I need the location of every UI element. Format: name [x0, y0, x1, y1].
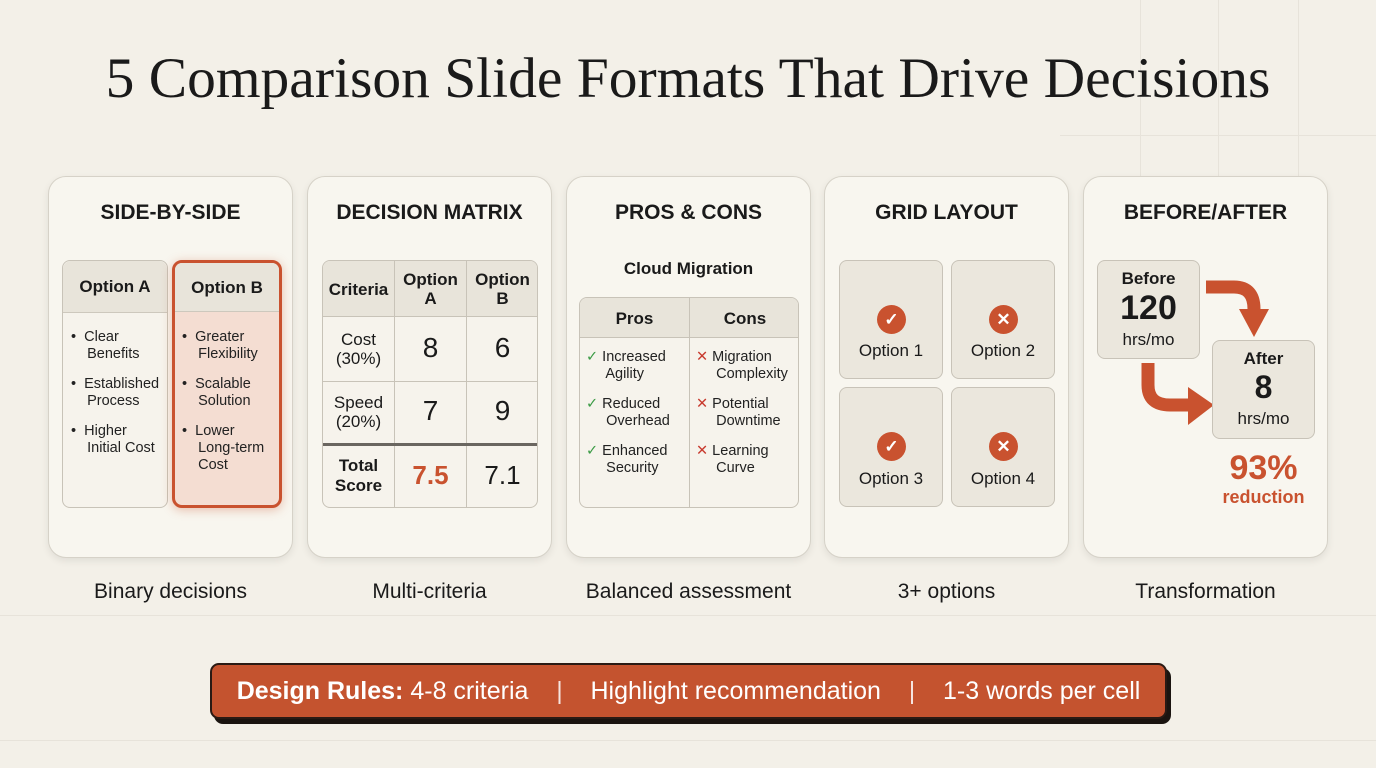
- caption: multi-criteria: Multi-criteria: [372, 580, 487, 603]
- option 2 tile: Option 2: [971, 341, 1035, 360]
- matrix table: Speed: [334, 393, 383, 412]
- heading: PROS & CONS: [615, 201, 762, 224]
- option A column: Benefits: [87, 346, 140, 362]
- option B column highlighted: Option B: [191, 278, 263, 297]
- pros cons table: ✕ Learning: [696, 443, 769, 459]
- option 1 tile: [839, 260, 943, 379]
- pros cons table: Complexity: [716, 366, 788, 382]
- matrix table: Total: [339, 456, 378, 475]
- option B column highlighted: Flexibility: [198, 346, 258, 362]
- option 1 tile: ✓: [884, 310, 899, 329]
- pros cons table: Security: [606, 460, 659, 476]
- callout: design rules bar: Design Rules: 4-8 criteria | Highlight recommendation | 1-3 words per cell: [237, 677, 1140, 705]
- stat: 93% reduction: 93%: [1229, 449, 1298, 487]
- caption: 3+ options: 3+ options: [898, 580, 995, 603]
- subtitle: Cloud Migration: [624, 259, 753, 278]
- panel: grid layout: [824, 176, 1069, 558]
- pros cons table: [579, 297, 799, 508]
- heading: BEFORE/AFTER: [1124, 201, 1287, 224]
- stat: 93% reduction: [1222, 449, 1304, 507]
- matrix table: Criteria: [329, 280, 388, 299]
- after box: hrs/mo: [1238, 409, 1289, 428]
- option A column: Option A: [79, 277, 151, 296]
- option 2 tile: [951, 260, 1055, 379]
- option 4 tile: Option 4: [971, 469, 1035, 488]
- arrow: curved right-down: [1206, 280, 1269, 337]
- caption: balanced assessment: Balanced assessment: [586, 580, 791, 603]
- option B column highlighted: Cost: [198, 457, 228, 473]
- background grid lines: [1060, 135, 1376, 136]
- option 2 tile: ✕: [996, 310, 1011, 329]
- matrix table: 7: [423, 395, 438, 426]
- title: 5 Comparison Slide Formats That Drive Decisions: [106, 47, 1270, 110]
- matrix table: A: [424, 289, 437, 308]
- matrix table: 9: [495, 395, 510, 426]
- pros cons table: Agility: [605, 366, 644, 382]
- matrix table: 7.1: [484, 460, 521, 490]
- matrix table: [322, 260, 538, 508]
- panel: before/after: [1083, 176, 1328, 558]
- matrix table: 6: [495, 332, 510, 363]
- option B column highlighted: [172, 260, 282, 508]
- pros cons table: ✓ Increased: [586, 349, 666, 365]
- option A column: • Higher: [71, 423, 127, 439]
- option 1 tile: Option 1: [859, 341, 923, 360]
- option A column: • Clear: [71, 329, 119, 345]
- option 3 tile: [839, 387, 943, 507]
- heading: SIDE-BY-SIDE: [100, 201, 241, 224]
- pros cons table: Cons: [724, 309, 766, 328]
- before box: Before: [1122, 269, 1175, 288]
- option 3 tile: Option 3: [859, 469, 923, 488]
- before box: hrs/mo: [1123, 330, 1174, 349]
- option B column highlighted: • Greater: [182, 329, 244, 345]
- matrix table: 8: [423, 332, 438, 363]
- stat: 93% reduction: reduction: [1222, 487, 1304, 507]
- pros cons table: Downtime: [716, 413, 781, 429]
- option A column: • Established: [71, 376, 159, 392]
- option B column highlighted: Long-term: [198, 440, 264, 456]
- matrix table: Score: [335, 476, 382, 495]
- option A column: [62, 260, 168, 508]
- pros cons table: ✓ Enhanced: [586, 443, 668, 459]
- matrix table: Option: [475, 270, 530, 289]
- panel: side-by-side: [48, 176, 293, 558]
- after box: 8: [1255, 369, 1272, 405]
- option 3 tile: ✓: [884, 437, 899, 456]
- option 4 tile: ✕: [996, 437, 1011, 456]
- before box: 120: [1120, 289, 1177, 327]
- pros cons table: ✕ Potential: [696, 396, 769, 412]
- caption: transformation: Transformation: [1135, 580, 1276, 603]
- pros cons table: Pros: [616, 309, 653, 328]
- matrix table: B: [496, 289, 509, 308]
- pros cons table: ✕ Migration: [696, 349, 772, 365]
- panel: decision matrix: [307, 176, 552, 558]
- callout: design rules bar: [210, 663, 1167, 719]
- heading: DECISION MATRIX: [336, 201, 523, 224]
- option A column: Process: [87, 393, 140, 409]
- pros cons table: Curve: [716, 460, 755, 476]
- option 4 tile: [951, 387, 1055, 507]
- caption: binary decisions: Binary decisions: [94, 580, 247, 603]
- panel: pros & cons: [566, 176, 811, 558]
- pros cons table: Overhead: [606, 413, 670, 429]
- after box: After: [1244, 349, 1283, 368]
- option B column highlighted: • Lower: [182, 423, 235, 439]
- pros cons table: ✓ Reduced: [586, 396, 660, 412]
- matrix table: (20%): [336, 412, 381, 431]
- matrix table: Cost: [341, 330, 376, 349]
- after box: [1212, 340, 1315, 439]
- arrow: curved down-right: [1142, 363, 1212, 425]
- matrix table: Option: [403, 270, 458, 289]
- option A column: Initial Cost: [87, 440, 155, 456]
- matrix table: (30%): [336, 349, 381, 368]
- heading: GRID LAYOUT: [875, 201, 1018, 224]
- before box: [1097, 260, 1200, 359]
- matrix table: 7.5: [412, 460, 449, 490]
- option B column highlighted: • Scalable: [182, 376, 251, 392]
- option B column highlighted: Solution: [198, 393, 251, 409]
